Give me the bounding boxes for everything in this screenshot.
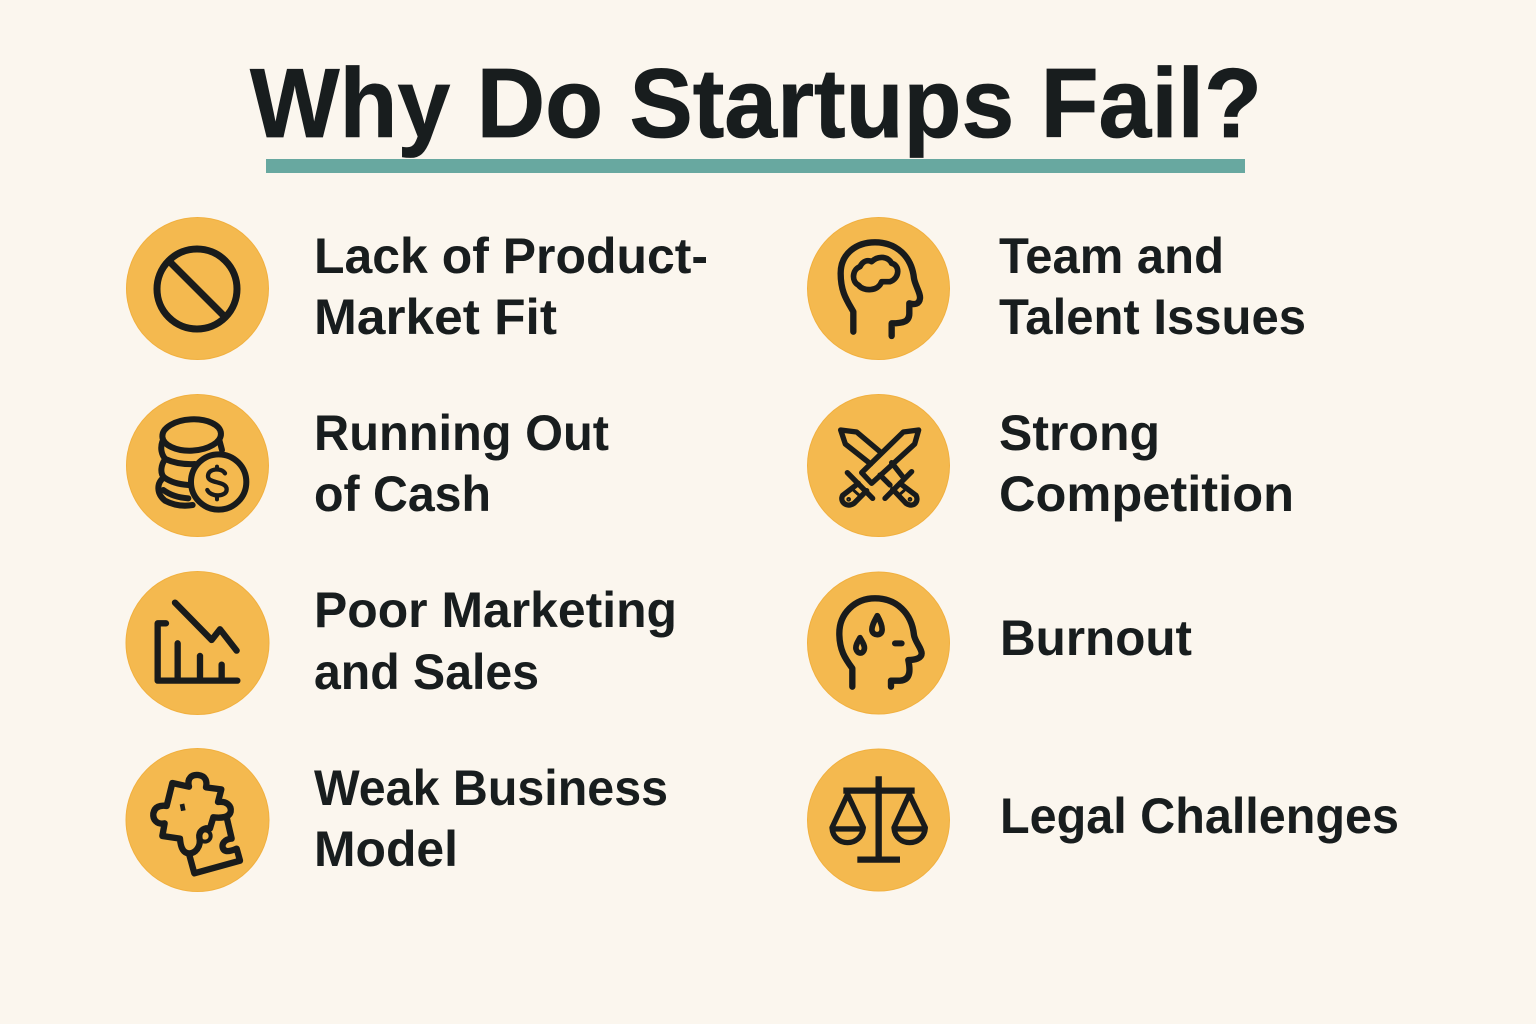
label: Team and Talent Issues [999, 228, 1306, 345]
icon: declining chart [126, 572, 269, 714]
label: Running Out of Cash [314, 405, 609, 522]
item: Strong Competition [808, 394, 1294, 536]
icon: head with brain [808, 218, 950, 360]
label: Weak Business Model: Weak Business [314, 760, 668, 816]
item: Weak Business Model [126, 748, 668, 892]
label: Burnout: Burnout [1000, 610, 1192, 666]
label: Lack of Product-Market Fit [314, 228, 708, 345]
icon: head with sweat drops [808, 572, 950, 714]
label: Poor Marketing and Sales: Poor Marketing [314, 582, 677, 638]
icon: puzzle pieces [126, 748, 269, 892]
label: Poor Marketing and Sales: and Sales [314, 644, 539, 700]
title: Why Do Startups Fail? [250, 48, 1262, 158]
item: Burnout [808, 572, 1192, 714]
label: Legal Challenges: Legal Challenges [1000, 788, 1399, 844]
label: Strong Competition: Strong [999, 405, 1160, 461]
label: Weak Business Model [314, 760, 668, 877]
item: Team and Talent Issues [808, 218, 1306, 360]
item: Running Out of Cash [126, 394, 609, 536]
icon: crossed swords [808, 394, 950, 536]
label: Running Out of Cash: of Cash [314, 466, 491, 522]
icon: balance scales [808, 749, 950, 891]
item: Legal Challenges [808, 749, 1399, 891]
label: Team and Talent Issues: Talent Issues [999, 289, 1306, 345]
icon: prohibited sign [126, 218, 268, 360]
label: Strong Competition [999, 405, 1294, 522]
icon: coin stack with dollar [126, 394, 268, 536]
label: Poor Marketing and Sales [314, 582, 677, 700]
title underline [266, 159, 1245, 173]
label: Running Out of Cash: Running Out [314, 405, 609, 461]
label: Strong Competition: Competition [999, 466, 1294, 522]
item: Lack of Product-Market Fit [126, 218, 708, 360]
label: Lack of Product-Market Fit: Market Fit [314, 289, 557, 345]
item: Poor Marketing and Sales [126, 572, 677, 714]
label: Team and Talent Issues: Team and [999, 228, 1224, 284]
label: Lack of Product-Market Fit: Lack of Product- [314, 228, 708, 284]
label: Weak Business Model: Model [314, 821, 458, 877]
